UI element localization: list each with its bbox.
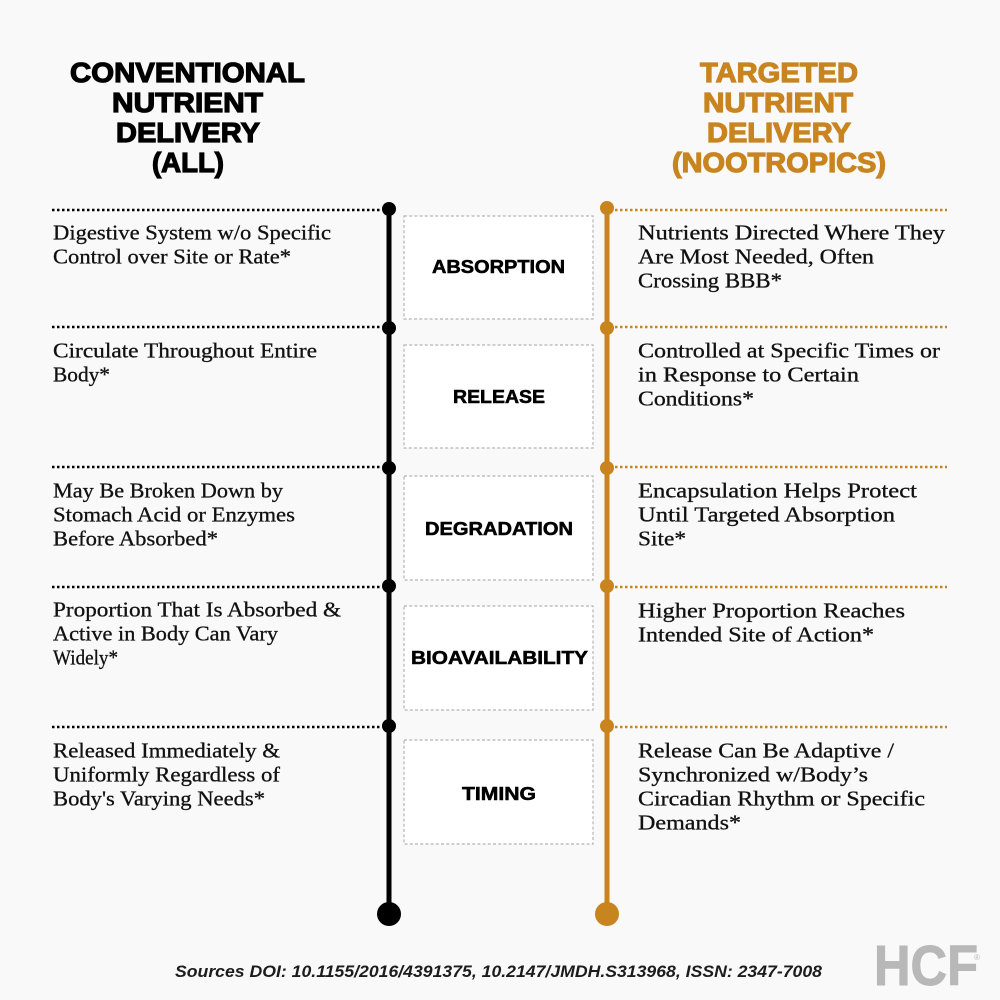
text: conventional degradation: Before Absorbed* — [53, 526, 218, 550]
text: conventional timing: Body's Varying Needs* — [53, 786, 265, 810]
text: targeted release: Controlled at Specific Times or — [638, 338, 940, 362]
heading: targeted nutrient delivery: (NOOTROPICS) — [672, 147, 886, 178]
heading: conventional nutrient delivery: NUTRIENT — [112, 87, 263, 118]
label box: release — [404, 345, 593, 448]
label box: bioavailability — [404, 606, 593, 710]
label box: bioavailability: BIOAVAILABILITY — [411, 647, 589, 668]
text: targeted release: Conditions* — [638, 386, 754, 410]
text: targeted release — [638, 338, 940, 410]
sources: Sources DOI: 10.1155/2016/4391375, 10.2147/JMDH.S313968, ISSN: 2347-7008 — [175, 962, 823, 981]
logo: HCF: HCF — [874, 934, 978, 998]
text: conventional absorption — [53, 220, 331, 268]
text: conventional bioavailability — [53, 597, 341, 669]
text: conventional release: Circulate Throughout Entire — [53, 338, 317, 362]
text: targeted degradation: Until Targeted Absorption — [638, 502, 896, 526]
text: targeted absorption — [638, 220, 946, 292]
text: conventional release — [53, 338, 317, 386]
text: targeted bioavailability: Intended Site of Action* — [638, 622, 874, 646]
label box: timing — [404, 740, 593, 844]
heading: targeted nutrient delivery — [672, 57, 886, 178]
text: targeted bioavailability: Higher Proportion Reaches — [638, 598, 905, 622]
text: conventional bioavailability: Widely* — [53, 645, 118, 669]
text: conventional bioavailability: Active in Body Can Vary — [53, 621, 279, 645]
label box: timing: TIMING — [462, 783, 536, 804]
text: targeted bioavailability — [638, 598, 905, 646]
heading: targeted nutrient delivery: DELIVERY — [707, 117, 851, 148]
text: targeted release: in Response to Certain — [638, 362, 860, 386]
heading: conventional nutrient delivery: CONVENTIONAL — [70, 57, 305, 88]
heading: targeted nutrient delivery: NUTRIENT — [703, 87, 853, 118]
text: targeted absorption: Crossing BBB* — [638, 268, 782, 292]
label box: degradation: DEGRADATION — [425, 518, 573, 539]
label box: absorption — [404, 216, 593, 319]
label box: degradation — [404, 476, 593, 580]
timeline: conventional — [52, 202, 401, 926]
heading: conventional nutrient delivery: DELIVERY — [116, 117, 260, 148]
text: conventional absorption: Digestive System w/o Specific — [53, 220, 331, 244]
text: targeted timing: Circadian Rhythm or Specific — [638, 786, 925, 810]
text: targeted timing: Synchronized w/Body’s — [638, 762, 868, 786]
logo: HCF: ® — [974, 953, 980, 962]
text: targeted timing — [638, 738, 925, 834]
text: targeted degradation — [638, 478, 917, 550]
heading: conventional nutrient delivery: (ALL) — [152, 147, 224, 178]
timeline: targeted — [595, 201, 947, 926]
text: conventional timing: Uniformly Regardless of — [53, 762, 280, 786]
text: targeted timing: Release Can Be Adaptive / — [638, 738, 894, 762]
text: targeted degradation: Site* — [638, 526, 686, 550]
label box: release: RELEASE — [453, 386, 545, 407]
heading: conventional nutrient delivery — [70, 57, 305, 178]
text: conventional degradation: Stomach Acid or Enzymes — [53, 502, 295, 526]
text: targeted absorption: Nutrients Directed Where They — [638, 220, 946, 244]
text: conventional timing: Released Immediately & — [53, 738, 280, 762]
text: targeted absorption: Are Most Needed, Often — [638, 244, 875, 268]
text: conventional release: Body* — [53, 362, 110, 386]
text: conventional timing — [53, 738, 280, 810]
label box: absorption: ABSORPTION — [432, 256, 565, 277]
text: conventional degradation: May Be Broken Down by — [53, 478, 284, 502]
text: conventional bioavailability: Proportion That Is Absorbed & — [53, 597, 341, 621]
text: targeted degradation: Encapsulation Helps Protect — [638, 478, 917, 502]
heading: targeted nutrient delivery: TARGETED — [700, 57, 858, 88]
text: conventional degradation — [53, 478, 295, 550]
text: targeted timing: Demands* — [638, 810, 741, 834]
text: conventional absorption: Control over Site or Rate* — [53, 244, 291, 268]
